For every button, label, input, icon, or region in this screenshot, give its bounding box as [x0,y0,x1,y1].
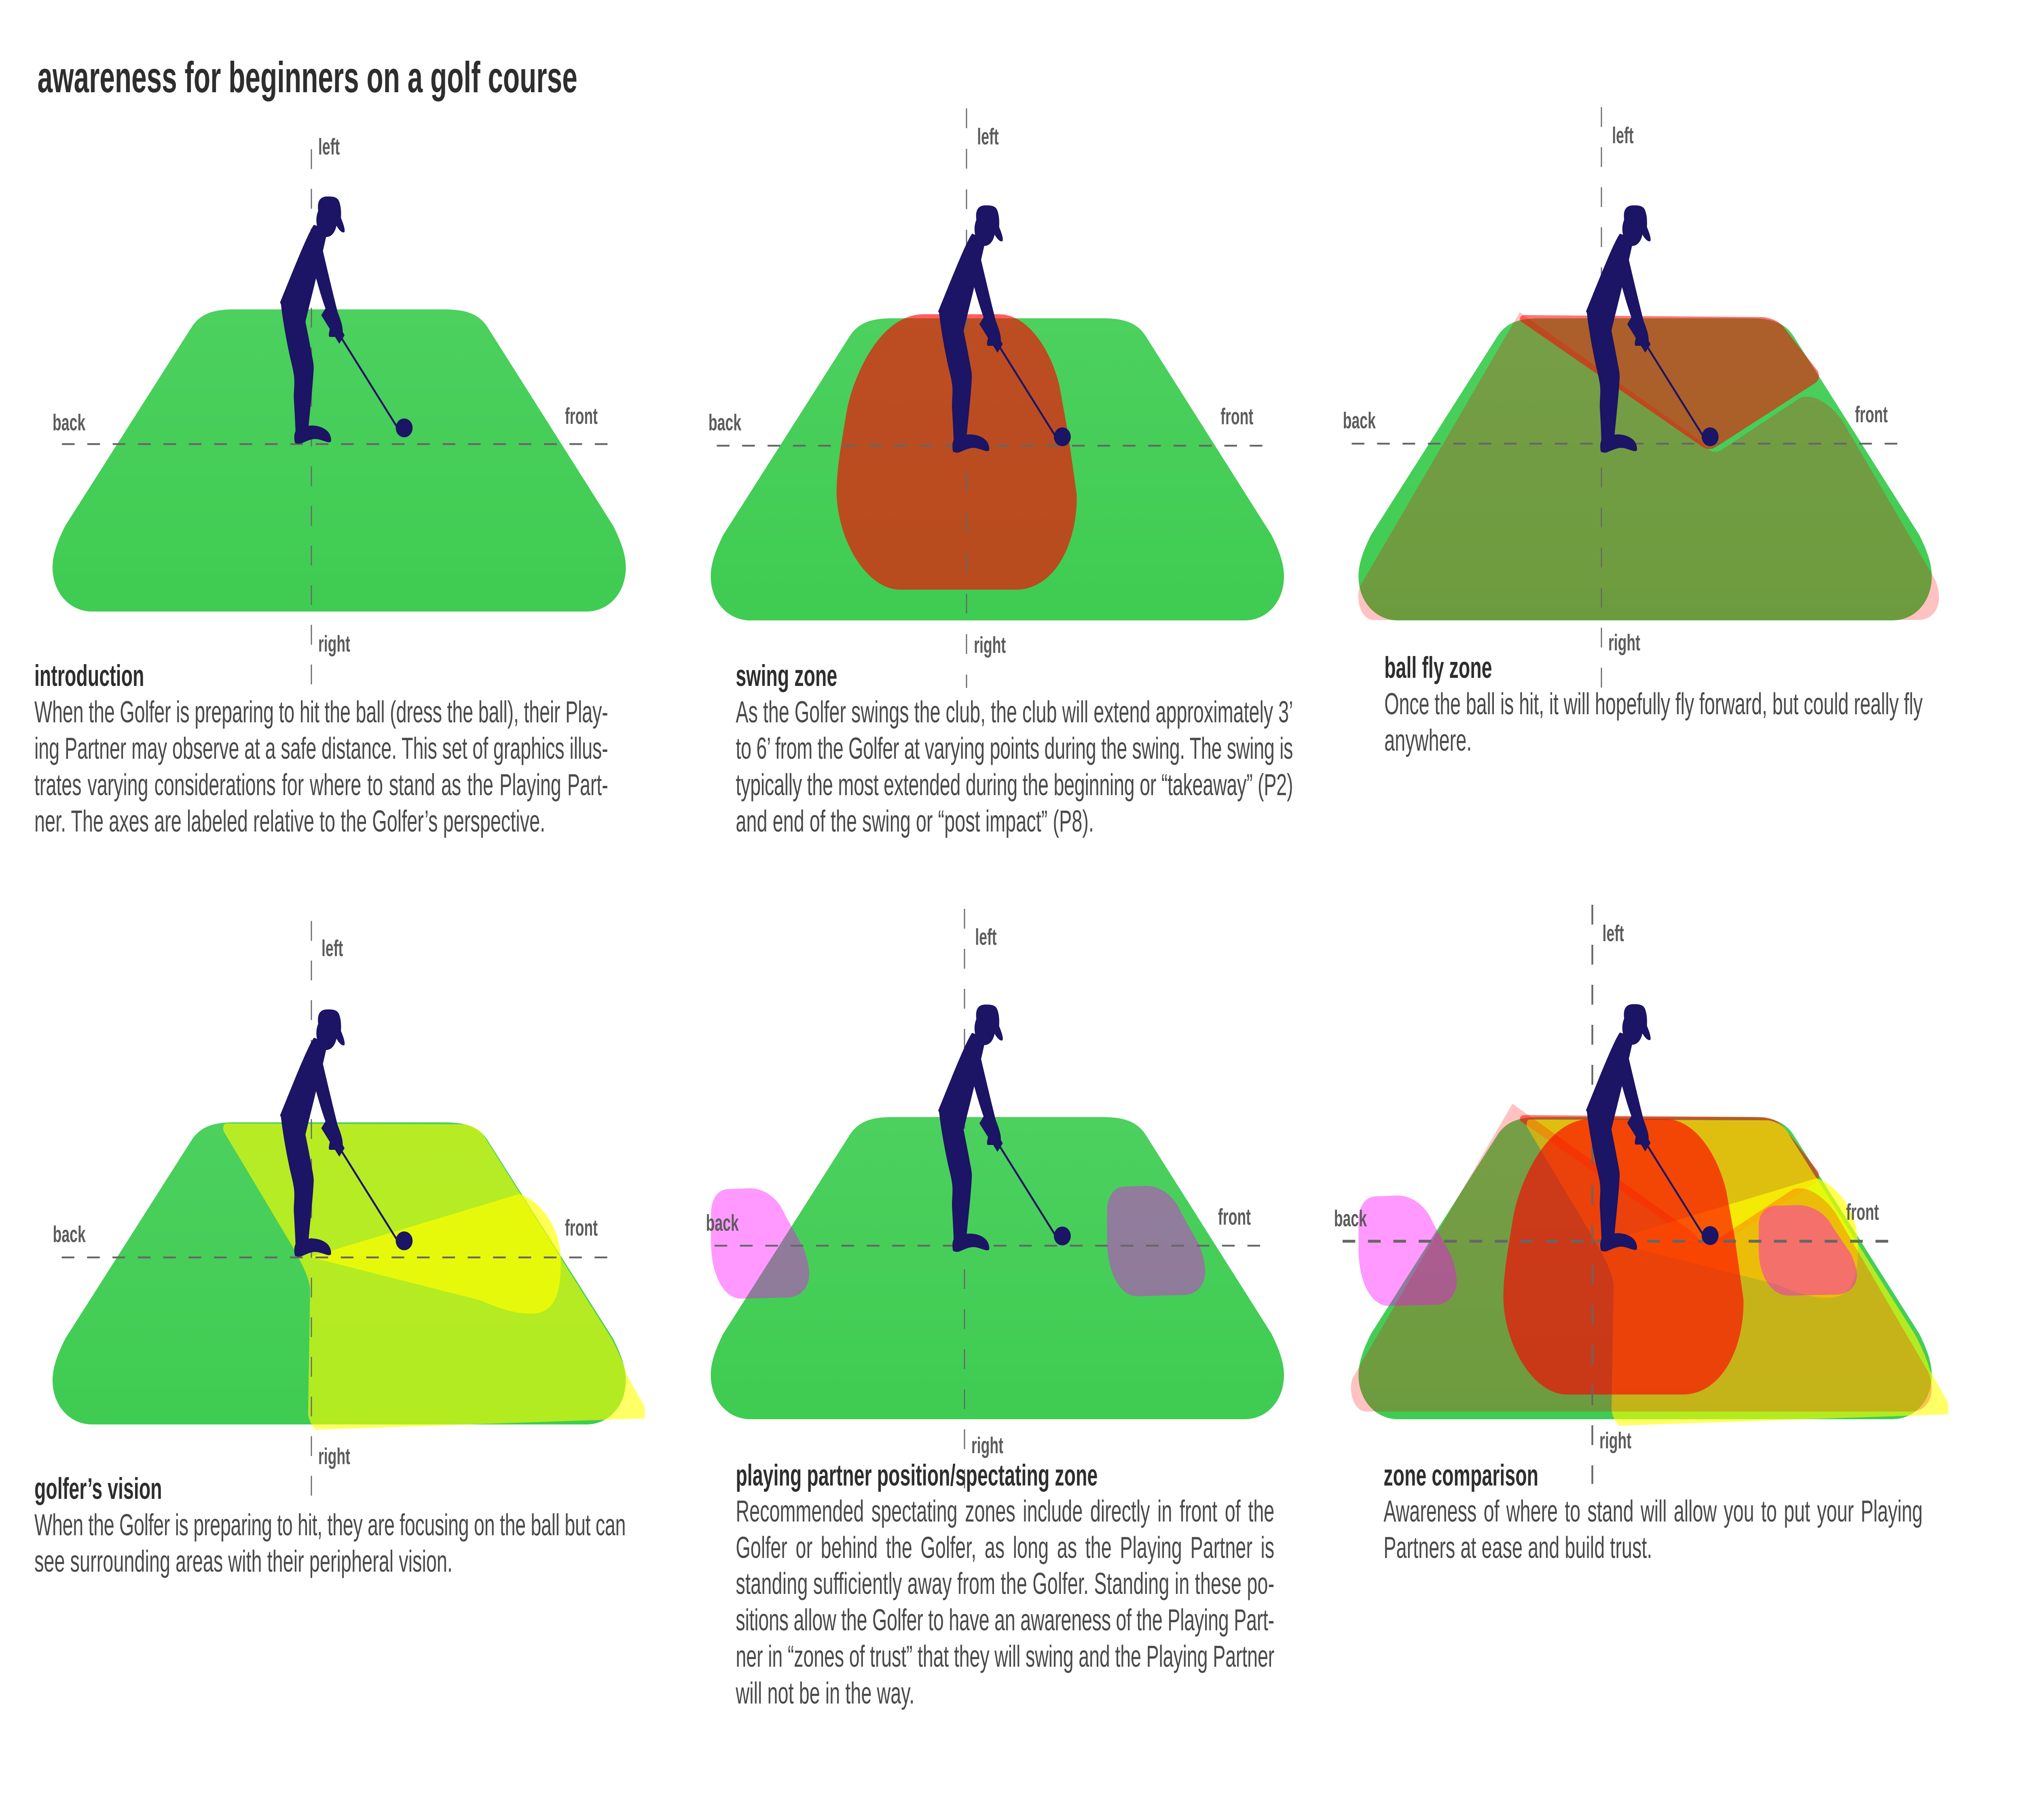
peripheral vision area [223,1124,645,1430]
axis labels: left [1612,123,1634,148]
axis labels: right [318,631,350,657]
ball fly zone: upper wedge [1520,315,1819,449]
text block: Awareness of where to stand will allow you to put your Playing [1383,1494,1923,1528]
heading: golfer’s vision [34,1472,162,1506]
text block: Partners at ease and build trust. [1383,1531,1652,1565]
axes [1343,905,1889,1484]
heading: ball fly zone [1384,651,1492,685]
axis labels: left [1602,921,1624,946]
axis labels: right [318,1444,350,1469]
icon: golfer [1586,1004,1719,1251]
axis labels: back [706,1211,739,1236]
axis labels: right [974,633,1006,658]
axis labels: front [565,1215,598,1241]
text block [34,695,608,838]
icon: golfer [280,197,412,444]
swing zone shape [1504,1119,1743,1395]
text block: anywhere. [1384,724,1472,758]
ball fly upper wedge [1520,1115,1819,1249]
axis labels [1334,921,1879,1454]
text block: will not be in the way. [736,1676,914,1710]
axis labels: right [1599,1428,1631,1454]
axis labels: front [1846,1200,1879,1225]
panel: golfer's vision [34,921,645,1579]
text block: ner. The axes are labeled relative to the Golfer’s perspective. [34,804,545,838]
panel: zone comparison [1334,905,1948,1565]
text block: When the Golfer is preparing to hit the ball (dress the ball), their Play- [34,695,608,729]
text block [1384,687,1923,758]
text block: see surrounding areas with their peripheral vision. [34,1545,453,1579]
spectating zone: in front [1107,1186,1205,1296]
axis labels: right [971,1433,1003,1458]
text block: ner in “zones of trust” that they will swing and the Playing Partner [736,1640,1274,1674]
text block: When the Golfer is preparing to hit, they are focusing on the ball but can [34,1508,626,1542]
text block [1383,1494,1923,1565]
heading: swing zone [736,659,837,693]
text block: standing sufficiently away from the Golfer. Standing in these po- [736,1567,1274,1601]
axis labels: front [1855,402,1888,427]
axes [62,149,608,688]
tee area [1358,1117,1932,1419]
spectating zone: in front [1759,1205,1857,1295]
panel: swing zone [709,108,1293,838]
focused vision cone [1607,1178,1858,1298]
icon: golfer [938,205,1071,453]
axis labels: left [321,936,343,961]
focused vision cone [310,1194,561,1314]
text block [34,1508,626,1579]
text block: Golfer or behind the Golfer, as long as the Playing Partner is [736,1531,1274,1565]
axes [61,921,608,1500]
axis labels: front [1218,1204,1251,1230]
text block: to 6’ from the Golfer at varying points during the swing. The swing is [736,732,1293,766]
axis labels: back [1334,1206,1367,1232]
panel: introduction [34,134,626,838]
axis labels [706,925,1251,1458]
tee area [711,1117,1284,1419]
text block [736,695,1293,838]
spectating zone: behind [711,1188,809,1299]
heading: zone comparison [1383,1459,1538,1492]
panel: playing partner position [706,909,1284,1710]
axis labels: front [565,404,598,429]
axis labels [1343,123,1888,656]
axis labels: back [1343,408,1376,434]
tee area [53,1122,626,1424]
axis labels: left [975,925,997,950]
text block: typically the most extended during the beginning or “takeaway” (P2) [736,768,1293,802]
icon: golfer [1586,205,1719,453]
text block: Once the ball is hit, it will hopefully fly forward, but could really fly [1384,687,1923,721]
tee area [1358,318,1932,620]
axes [1352,107,1898,688]
axis labels [709,124,1253,658]
axis labels: right [1608,630,1640,656]
text block: sitions allow the Golfer to have an awareness of the Playing Part- [736,1603,1274,1637]
spectating zone: behind [1358,1196,1457,1306]
axis labels: left [977,124,999,150]
icon: golfer [280,1009,412,1257]
swing zone shape [837,314,1077,590]
text block: trates varying considerations for where to stand as the Playing Part- [34,768,608,802]
axes [715,909,1262,1488]
text block: and end of the swing or “post impact” (P8). [736,804,1094,838]
ball fly zone: wide area [1358,312,1939,620]
title: awareness for beginners on a golf course [37,53,577,102]
text block [736,1494,1274,1710]
text block: As the Golfer swings the club, the club will extend approximately 3’ [736,695,1293,729]
axis labels: back [53,1222,86,1247]
axis labels [53,936,598,1469]
tee area [711,318,1284,620]
tee area [53,309,626,612]
heading: playing partner position/spectating zone [736,1459,1098,1492]
text block: ing Partner may observe at a safe distance. This set of graphics illus- [34,732,608,766]
axis labels: back [709,410,741,436]
peripheral vision area [1527,1120,1948,1426]
axis labels [53,134,598,657]
heading: introduction [34,659,144,693]
axis labels: left [318,134,340,160]
icon: golfer [938,1005,1071,1252]
axis labels: front [1220,404,1253,430]
ball fly wide area [1351,1104,1932,1412]
text block: Recommended spectating zones include directly in front of the [736,1494,1274,1528]
panel: ball fly zone [1343,107,1939,758]
axis labels: back [53,410,86,436]
axes [717,108,1263,688]
